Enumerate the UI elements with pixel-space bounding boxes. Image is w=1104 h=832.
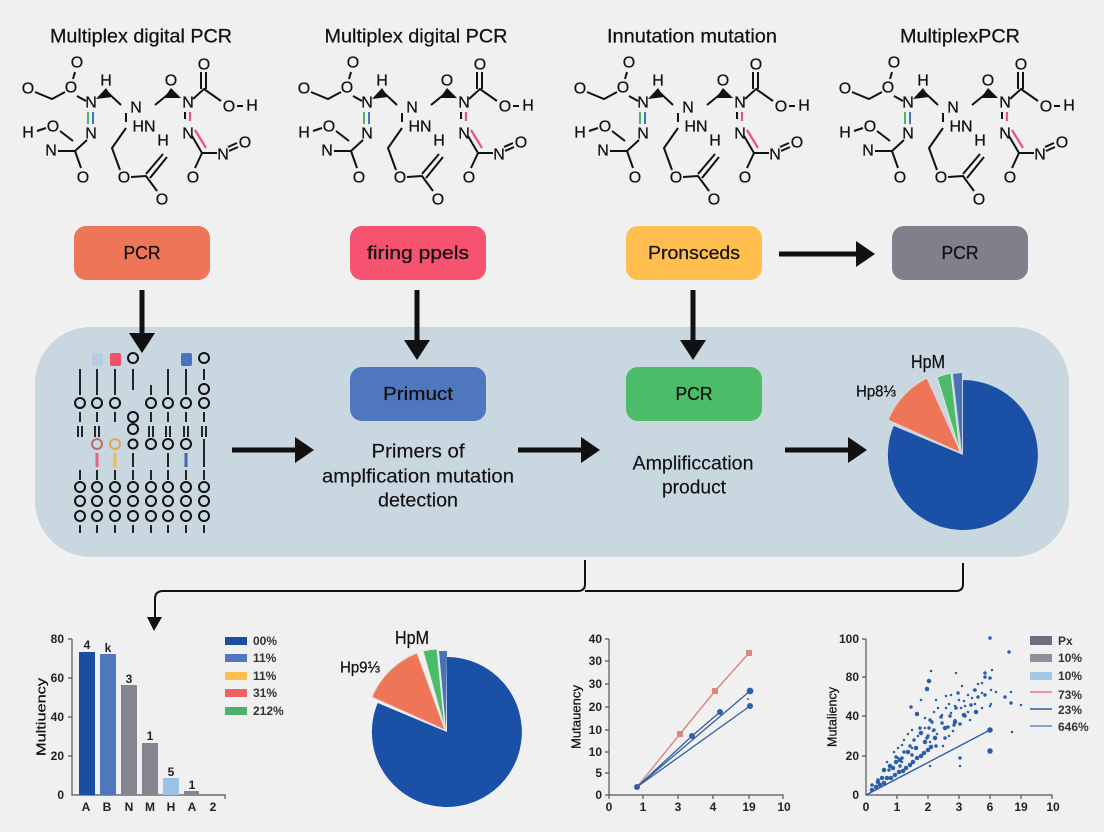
- molecule structure 1: N: [85, 126, 97, 142]
- arrow: ladder to primers: [232, 437, 314, 463]
- legend: bar chart: 212%: [253, 704, 284, 718]
- molecule structure 2: O: [347, 54, 359, 72]
- molecule structure 4: O: [1004, 170, 1016, 186]
- scatter chart: 80: [846, 670, 859, 684]
- scatter chart: Mutaliency: [824, 687, 840, 747]
- molecule structure 2: O: [298, 80, 310, 98]
- line chart: 0: [595, 788, 602, 802]
- legend: scatter chart: 646%: [1058, 720, 1089, 734]
- molecule structure 4: O: [982, 72, 994, 90]
- molecule structure 1: O: [71, 54, 83, 72]
- molecule structure 1: N: [182, 126, 194, 142]
- molecule structure 1: O: [187, 170, 199, 186]
- molecule structure 2: O: [441, 72, 453, 90]
- line chart: 20: [589, 700, 602, 714]
- molecule structure 4: O: [973, 192, 985, 208]
- molecule structure 4: O: [864, 118, 876, 136]
- molecule structure 2: [298, 54, 534, 208]
- bar chart: k: [105, 641, 112, 655]
- legend: scatter chart: 73%: [1058, 688, 1082, 702]
- molecule structure 1: H: [22, 124, 34, 142]
- bar chart: B: [103, 800, 112, 814]
- molecule structure 3: O: [574, 80, 586, 98]
- arrow: orange PCR down into panel: [129, 290, 155, 353]
- molecule structure 2: O: [474, 56, 486, 74]
- arrow: firing ppels down: [404, 290, 430, 360]
- bar chart: 80: [51, 632, 64, 646]
- molecule structure 3: O: [791, 134, 803, 152]
- box: firing ppels: [350, 226, 486, 280]
- molecule structure 2: N: [321, 142, 333, 160]
- molecule structure 1: [22, 54, 258, 208]
- molecule structure 3: O: [708, 192, 720, 208]
- series: red line: [637, 650, 752, 787]
- molecule structure 2: HN: [408, 118, 432, 136]
- molecule structure 3: H: [709, 132, 721, 150]
- pie chart: results: [340, 628, 522, 807]
- scatter chart: 19: [1014, 800, 1028, 814]
- molecule structure 4: O: [1056, 134, 1068, 152]
- series: blue lines: [634, 688, 753, 790]
- molecule structure 3: O: [717, 72, 729, 90]
- molecule structure 3: O: [629, 170, 641, 186]
- line chart: 5: [595, 766, 602, 780]
- bar chart: 4: [84, 638, 91, 652]
- molecule structure 2: N: [458, 94, 470, 112]
- legend: scatter chart: [1030, 634, 1089, 734]
- molecule structure 2: O: [353, 170, 365, 186]
- legend: scatter chart: Px: [1058, 634, 1073, 648]
- molecule structure 4: O: [882, 80, 894, 96]
- scatter chart: 2: [925, 800, 932, 814]
- molecule structure 3: O: [599, 118, 611, 136]
- molecule structure 4: N: [862, 142, 874, 160]
- molecule structure 2: O: [341, 80, 353, 96]
- legend: bar chart: 00%: [253, 634, 277, 648]
- molecule structure 4: O: [1015, 56, 1027, 74]
- legend: scatter chart: 10%: [1058, 651, 1082, 665]
- legend: scatter chart: 23%: [1058, 703, 1082, 717]
- box: PCR green: PCR: [676, 384, 712, 404]
- box: Pronsceds: Pronsceds: [648, 243, 740, 263]
- line chart: 30: [589, 677, 602, 691]
- heading: column 3: Innutation mutation: [607, 26, 777, 48]
- molecule structure 3: H: [652, 72, 664, 90]
- molecule structure 4: O: [1040, 98, 1052, 116]
- bar chart: A: [188, 800, 197, 814]
- scatter chart: 100: [839, 632, 859, 646]
- line chart: 0: [606, 800, 613, 814]
- molecule structure 4: H: [974, 132, 986, 150]
- molecule structure 4: H: [1063, 98, 1075, 114]
- scatter chart: 20: [846, 749, 859, 763]
- bar chart: 5: [168, 765, 175, 779]
- molecule structure 2: H: [376, 72, 388, 90]
- pie chart: panel: Hp8⅓: [856, 384, 896, 400]
- text block: amplification product: product: [662, 478, 727, 498]
- box: PCR green: [626, 367, 762, 421]
- molecule structure 1: O: [47, 118, 59, 136]
- box: PCR grey: PCR: [942, 243, 978, 263]
- text block: primers: amplfication mutation: [322, 466, 514, 488]
- line chart: 19: [742, 800, 756, 814]
- text block: primers: Primers of: [372, 442, 465, 462]
- arrow: amplification to pie: [785, 437, 867, 463]
- molecule structure 1: O: [22, 80, 34, 98]
- pie chart: results: HpM: [395, 628, 429, 648]
- molecule structure 4: O: [935, 170, 947, 186]
- bar chart: A: [82, 800, 91, 814]
- molecule structure 4: [839, 54, 1075, 208]
- molecule structure 1: N: [182, 94, 194, 112]
- text block: amplification product: Amplificcation: [632, 454, 754, 474]
- molecule structure 3: H: [798, 98, 810, 114]
- molecule structure 1: O: [118, 170, 130, 186]
- line chart: 3: [675, 800, 682, 814]
- molecule structure 1: O: [156, 192, 168, 208]
- text block: primers: [322, 442, 514, 512]
- scatter chart: 6: [987, 800, 994, 814]
- molecule structure 4: N: [999, 126, 1011, 142]
- bar chart: 20: [51, 749, 64, 763]
- molecule structure 1: N: [45, 142, 57, 160]
- scatter points: [872, 638, 1021, 790]
- regression line: [866, 730, 990, 795]
- box: Primuct: Primuct: [383, 384, 453, 404]
- molecule structure 3: O: [670, 170, 682, 186]
- bar chart: M: [145, 800, 155, 814]
- bar chart: 2: [210, 800, 217, 814]
- box: PCR orange: [74, 226, 210, 280]
- molecule structure 3: N: [734, 94, 746, 112]
- heading: column 2: Multiplex digital PCR: [324, 26, 508, 48]
- molecule structure 3: O: [739, 170, 751, 186]
- legend: scatter chart: 10%: [1058, 669, 1082, 683]
- bar chart: [34, 632, 225, 814]
- bar chart: 60: [51, 671, 64, 685]
- scatter chart: 40: [846, 709, 859, 723]
- molecule structure 2: H: [433, 132, 445, 150]
- molecule structure 1: O: [239, 134, 251, 152]
- molecule structure 3: [574, 54, 810, 208]
- heading: column 4: MultiplexPCR: [900, 26, 1020, 48]
- line chart: 40: [589, 632, 602, 646]
- bar chart: 1: [147, 729, 154, 743]
- molecule structure 4: N: [999, 94, 1011, 112]
- molecule structure 2: O: [515, 134, 527, 152]
- bar chart: N: [125, 800, 133, 814]
- molecule structure 3: O: [750, 56, 762, 74]
- molecule structure 3: N: [597, 142, 609, 160]
- molecule structure 1: N: [85, 94, 97, 112]
- legend: bar chart: 11%: [253, 669, 277, 683]
- heading: column 1: Multiplex digital PCR: [50, 26, 232, 48]
- bar chart: 1: [189, 778, 196, 792]
- molecule structure 1: N: [130, 100, 142, 116]
- molecule structure 2: N: [493, 146, 505, 164]
- text block: amplification product: [632, 454, 754, 498]
- molecule structure 4: N: [1034, 146, 1046, 164]
- line chart: [568, 632, 791, 814]
- scatter chart: 1: [894, 800, 901, 814]
- molecule structure 2: O: [499, 98, 511, 116]
- legend: bar chart: [225, 634, 284, 718]
- molecule structure 2: O: [463, 170, 475, 186]
- arrow: primers to amplification: [518, 437, 600, 463]
- molecule structure 3: O: [775, 98, 787, 116]
- molecule structure 1: H: [100, 72, 112, 90]
- y axis title: Multiuency: [34, 677, 48, 756]
- molecule structure 3: HN: [684, 118, 708, 136]
- molecule structure 2: N: [406, 100, 418, 116]
- molecule structure 2: N: [458, 126, 470, 142]
- scatter chart: 3: [956, 800, 963, 814]
- molecule structure 1: N: [217, 146, 229, 164]
- molecule structure 3: N: [769, 146, 781, 164]
- molecule structure 2: N: [361, 126, 373, 142]
- molecule structure 4: O: [839, 80, 851, 98]
- molecule structure 2: O: [323, 118, 335, 136]
- pie chart: results: Hp9⅓: [340, 660, 380, 676]
- pie chart: panel: HpM: [911, 352, 945, 372]
- arrow: Pronsceds down: [680, 290, 706, 360]
- line chart: 10: [589, 723, 602, 737]
- line chart: Mutauency: [568, 684, 584, 749]
- ladder diagram of strands: [75, 353, 209, 533]
- molecule structure 1: O: [65, 80, 77, 96]
- line chart: 4: [710, 800, 717, 814]
- pie chart: panel: [856, 352, 1038, 530]
- molecule structure 3: N: [682, 100, 694, 116]
- connector: panel to results: [147, 560, 963, 631]
- arrow: Pronsceds to grey PCR: [779, 241, 875, 267]
- scatter chart: 0: [852, 788, 859, 802]
- box: PCR orange: PCR: [124, 243, 160, 263]
- molecule structure 4: O: [888, 54, 900, 72]
- molecule structure 3: N: [637, 126, 649, 142]
- bar chart: 40: [51, 710, 64, 724]
- molecule structure 2: O: [394, 170, 406, 186]
- line chart: 10: [589, 745, 602, 759]
- molecule structure 1: O: [223, 98, 235, 116]
- molecule structure 1: O: [198, 56, 210, 74]
- line chart: 1: [640, 800, 647, 814]
- molecule structure 3: O: [617, 80, 629, 96]
- box: firing ppels: firing ppels: [367, 243, 469, 263]
- molecule structure 1: H: [246, 98, 258, 114]
- molecule structure 2: O: [432, 192, 444, 208]
- line chart: 10: [777, 800, 791, 814]
- molecule structure 4: HN: [949, 118, 973, 136]
- molecule structure 1: O: [165, 72, 177, 90]
- box: PCR grey: [892, 226, 1028, 280]
- molecule structure 3: H: [574, 124, 586, 142]
- scatter chart: 10: [1046, 800, 1060, 814]
- molecule structure 1: H: [157, 132, 169, 150]
- molecule structure 2: N: [361, 94, 373, 112]
- molecule structure 2: H: [522, 98, 534, 114]
- molecule structure 3: O: [623, 54, 635, 72]
- text block: primers: detection: [378, 490, 458, 512]
- panel: amplification workflow background: [35, 327, 1069, 557]
- box: Pronsceds: [626, 226, 762, 280]
- molecule structure 3: N: [734, 126, 746, 142]
- molecule structure 4: H: [839, 124, 851, 142]
- legend: bar chart: 11%: [253, 651, 277, 665]
- scatter chart: [824, 632, 1060, 814]
- molecule structure 3: N: [637, 94, 649, 112]
- molecule structure 2: H: [298, 124, 310, 142]
- bar chart: H: [167, 800, 175, 814]
- molecule structure 4: N: [902, 94, 914, 112]
- molecule structure 4: O: [894, 170, 906, 186]
- molecule structure 4: N: [902, 126, 914, 142]
- molecule structure 4: H: [917, 72, 929, 90]
- box: Primuct: [350, 367, 486, 421]
- line chart: 30: [589, 654, 602, 668]
- bar chart: 0: [57, 788, 64, 802]
- legend: bar chart: 31%: [253, 686, 277, 700]
- molecule structure 4: N: [947, 100, 959, 116]
- molecule structure 1: HN: [132, 118, 156, 136]
- scatter chart: 0: [863, 800, 870, 814]
- bars: [79, 652, 220, 795]
- molecule structure 1: O: [77, 170, 89, 186]
- bar chart: 3: [126, 672, 133, 686]
